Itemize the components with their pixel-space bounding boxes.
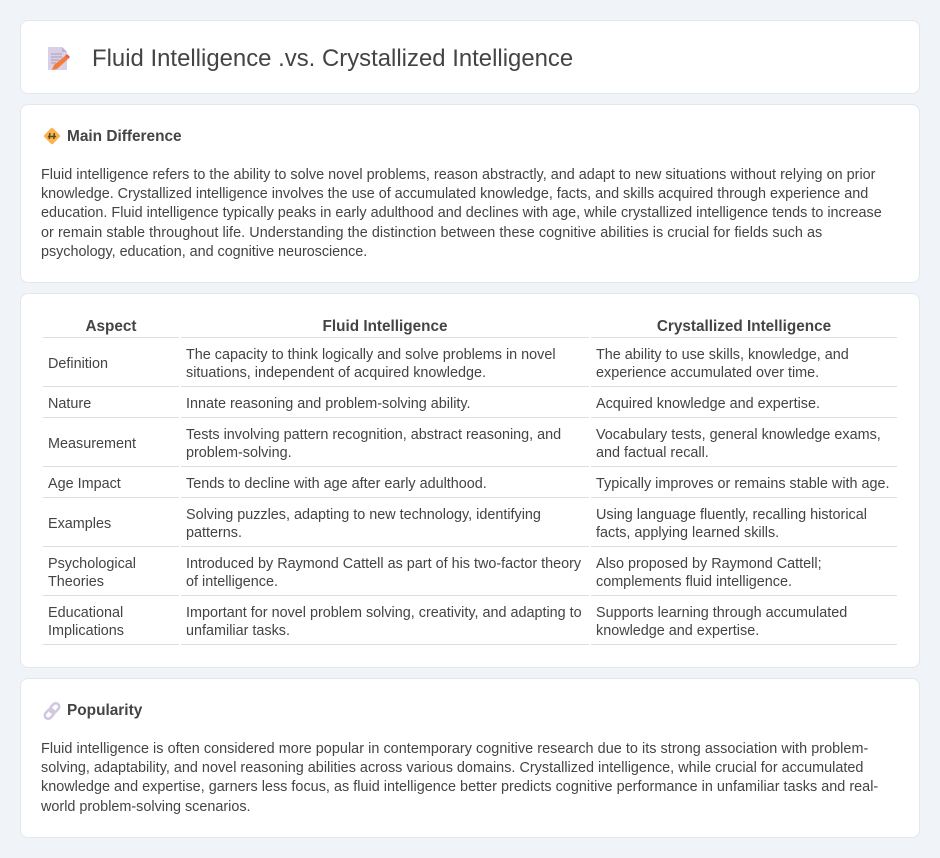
text block: main difference: education. Fluid intelligence typically peaks in early adulthood and declines with age, while crystallized intelligence tends to increase bbox=[41, 205, 882, 221]
table header: aspect: Aspect bbox=[85, 318, 136, 335]
icon: orange diamond bbox=[44, 128, 60, 144]
row: psychological theories bbox=[43, 556, 897, 596]
row: psychological theories: of intelligence. bbox=[186, 574, 278, 590]
row: nature bbox=[43, 396, 897, 418]
heading: popularity: Popularity bbox=[67, 702, 142, 719]
row: definition: Definition bbox=[48, 356, 108, 372]
row: educational implications: unfamiliar tasks. bbox=[186, 623, 290, 639]
row: nature: Acquired knowledge and expertise. bbox=[596, 396, 820, 412]
row: definition: situations, independent of acquired knowledge. bbox=[186, 365, 486, 381]
row: definition: The capacity to think logically and solve problems in novel bbox=[186, 347, 556, 363]
row: nature: Innate reasoning and problem-solving ability. bbox=[186, 396, 471, 412]
row: age impact: Age Impact bbox=[48, 476, 121, 492]
row: psychological theories: Introduced by Raymond Cattell as part of his two-factor theory bbox=[186, 556, 581, 572]
row: definition: The ability to use skills, knowledge, and bbox=[596, 347, 849, 363]
row: psychological theories: Also proposed by Raymond Cattell; bbox=[596, 556, 822, 572]
row: examples: patterns. bbox=[186, 525, 242, 541]
text block: main difference: Fluid intelligence refers to the ability to solve novel problems, reason abstractly, and adapt to new situations without relying on prior bbox=[41, 167, 876, 183]
row: examples: Solving puzzles, adapting to new technology, identifying bbox=[186, 507, 541, 523]
row: measurement: problem-solving. bbox=[186, 445, 292, 461]
row: psychological theories: Theories bbox=[48, 574, 104, 590]
table header: fluid intelligence bbox=[181, 317, 589, 338]
table header: crystallized intelligence: Crystallized Intelligence bbox=[657, 318, 831, 335]
text block: popularity: solving, adaptability, and novel reasoning abilities across various domains. Crystallized intelligence, while crucial for accumulated bbox=[41, 760, 863, 776]
heading: main difference: Main Difference bbox=[67, 128, 182, 145]
text block: popularity: world problem-solving scenarios. bbox=[41, 799, 251, 815]
row: examples: facts, applying learned skills. bbox=[596, 525, 779, 541]
row: definition bbox=[43, 347, 897, 387]
panel: title header bbox=[20, 20, 920, 94]
row: measurement: and factual recall. bbox=[596, 445, 709, 461]
text block: main difference: knowledge. Crystallized intelligence involves the use of accumulated knowledge, facts, and skills acquired through experience and bbox=[41, 186, 868, 202]
table header: fluid intelligence: Fluid Intelligence bbox=[323, 318, 447, 335]
panel: comparison table bbox=[20, 293, 920, 668]
title: Fluid Intelligence .vs. Crystallized Intelligence bbox=[92, 45, 573, 72]
row: educational implications: Implications bbox=[48, 623, 124, 639]
icon: chain link bbox=[44, 702, 60, 720]
row: nature: Nature bbox=[48, 396, 91, 412]
row: educational implications: Educational bbox=[48, 605, 123, 621]
text block: main difference bbox=[41, 167, 882, 260]
row: age impact: Tends to decline with age after early adulthood. bbox=[186, 476, 487, 492]
row: psychological theories: complements fluid intelligence. bbox=[596, 574, 792, 590]
panel: popularity bbox=[20, 678, 920, 838]
table header: crystallized intelligence bbox=[591, 317, 897, 338]
row: measurement: Tests involving pattern recognition, abstract reasoning, and bbox=[186, 427, 561, 443]
row: examples: Examples bbox=[48, 516, 111, 532]
text block: main difference: or remain stable throughout life. Understanding the distinction between these cognitive abilities is crucial for fields such as bbox=[41, 225, 822, 241]
row: psychological theories: Psychological bbox=[48, 556, 136, 572]
row: educational implications: knowledge and expertise. bbox=[596, 623, 759, 639]
row: educational implications bbox=[43, 605, 897, 645]
row: measurement: Measurement bbox=[48, 436, 136, 452]
row: definition: experience accumulated over time. bbox=[596, 365, 819, 381]
text block: popularity: knowledge and expertise, garners less focus, as fluid intelligence better predicts cognitive performance in unfamiliar tasks and real- bbox=[41, 779, 878, 795]
row: measurement: Vocabulary tests, general knowledge exams, bbox=[596, 427, 881, 443]
text block: main difference: psychology, education, and cognitive neuroscience. bbox=[41, 244, 367, 260]
panel: main difference bbox=[20, 104, 920, 283]
table header: aspect bbox=[43, 317, 179, 338]
row: educational implications: Supports learning through accumulated bbox=[596, 605, 847, 621]
row: age impact bbox=[43, 476, 897, 498]
row: age impact: Typically improves or remains stable with age. bbox=[596, 476, 890, 492]
text block: popularity: Fluid intelligence is often considered more popular in contemporary cognitive research due to its strong association with problem- bbox=[41, 741, 868, 757]
row: examples bbox=[43, 507, 897, 547]
text block: popularity bbox=[41, 741, 878, 815]
icon: document with pencil bbox=[48, 47, 70, 70]
row: educational implications: Important for novel problem solving, creativity, and adapting to bbox=[186, 605, 582, 621]
row: examples: Using language fluently, recalling historical bbox=[596, 507, 867, 523]
row: measurement bbox=[43, 427, 897, 467]
